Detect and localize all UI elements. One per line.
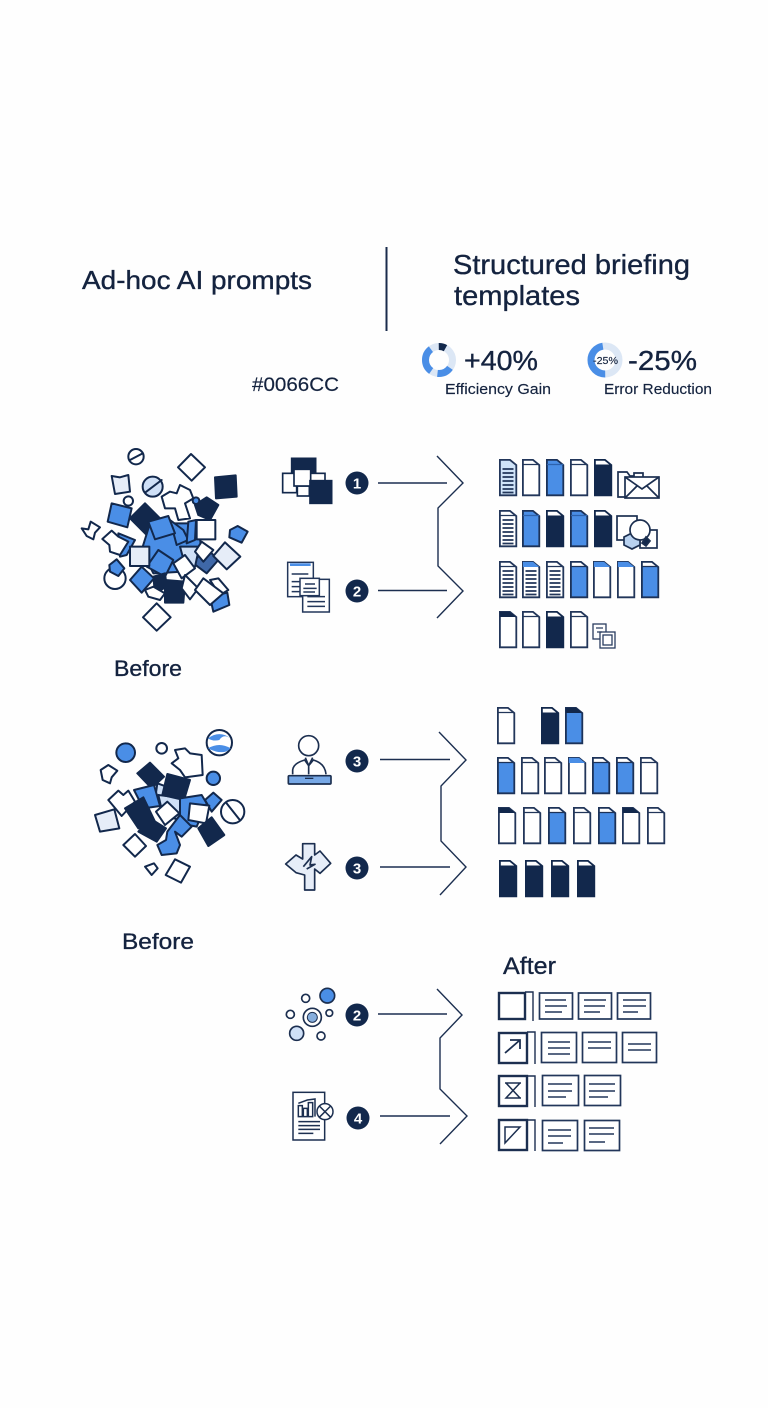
- badge: 1: [346, 472, 368, 494]
- heading: structured briefing templates: Structured briefing: [453, 249, 690, 280]
- stat: error reduction: -25%: [593, 355, 618, 367]
- icon: report with chart: [293, 1092, 333, 1140]
- template list row 4: [499, 1120, 620, 1151]
- icon: overlapping squares: [283, 458, 332, 503]
- label: before (first): Before: [114, 656, 182, 681]
- icon: person at laptop: [288, 736, 331, 784]
- stat: efficiency gain: Efficiency Gain: [445, 381, 551, 398]
- badge: 4: 4: [354, 1110, 363, 1128]
- badge: 4: [346, 1106, 370, 1130]
- badge: 2: 2: [353, 584, 361, 600]
- icon: stacked documents: [288, 562, 329, 612]
- template list row 1: [499, 992, 650, 1021]
- icon: cross-shaped puzzle: [286, 844, 331, 890]
- badge: 1: 1: [353, 476, 361, 492]
- badge: 2: [346, 580, 368, 602]
- donut chart: +40%: [426, 346, 452, 374]
- icon: copy stack: [593, 624, 615, 648]
- stat: efficiency gain: [426, 345, 551, 398]
- badge: 2: [346, 1004, 368, 1026]
- icon: bubbles cluster: [286, 988, 335, 1040]
- center divider: [386, 247, 388, 331]
- documents grid 2: [498, 708, 664, 896]
- heading: ad-hoc AI prompts: Ad-hoc AI prompts: [82, 265, 312, 295]
- icon: overlapping shapes: [617, 516, 657, 549]
- donut chart: -25%: [591, 346, 619, 374]
- documents grid 1: [500, 460, 659, 648]
- arrow: connector 1: [378, 456, 463, 618]
- stat: efficiency gain: +40%: [464, 345, 538, 376]
- label: before (second): Before: [122, 929, 194, 954]
- stat: error reduction: Error Reduction: [604, 381, 712, 398]
- template list row 2: [499, 1032, 656, 1064]
- badge: 3: [346, 750, 368, 772]
- badge: 3: 3: [353, 754, 361, 770]
- arrow: connector 3: [378, 989, 467, 1144]
- badge: 3: 3: [353, 860, 361, 878]
- scatter: chaotic shapes 1: [82, 449, 248, 631]
- icon: folder and envelope: [618, 472, 659, 498]
- color code label: #0066CC: [252, 375, 339, 396]
- badge: 2: 2: [353, 1008, 361, 1024]
- template list row 3: [499, 1076, 620, 1107]
- badge: 3: [346, 856, 368, 880]
- heading: structured briefing templates: templates: [454, 280, 580, 311]
- stat: error reduction: -25%: [628, 345, 697, 376]
- stat: error reduction: [591, 345, 712, 398]
- label: after: After: [503, 953, 556, 980]
- arrow: connector 2: [380, 732, 466, 895]
- scatter: chaotic shapes 2: [95, 730, 244, 883]
